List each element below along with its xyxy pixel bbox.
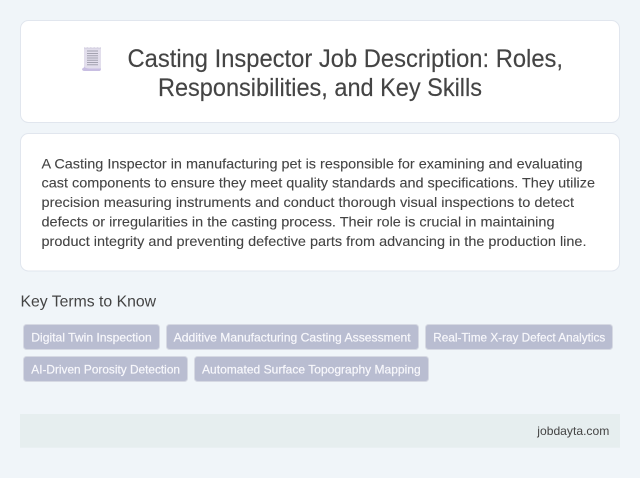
text block: description: precision measuring instruments and conduct thorough visual inspections to detect [42,194,574,210]
footer bar: jobdayta.com [536,424,609,438]
icon: document scroll [82,47,101,71]
tag: additive manufacturing casting assessment: Additive Manufacturing Casting Assessment [174,330,411,344]
text block: description: A Casting Inspector in manufacturing pet is responsible for examining and evaluating [42,155,582,171]
text block: description: cast components to ensure they meet quality standards and specifications. They utilize [42,174,595,190]
tag: automated surface topography mapping: Automated Surface Topography Mapping [202,362,421,376]
text block: description: product integrity and preventing defective parts from advancing in the production line. [42,233,586,249]
tag: additive manufacturing casting assessment [166,324,418,350]
heading: title: Casting Inspector Job Description: Roles, [128,45,563,73]
tag: digital twin inspection: Digital Twin Inspection [31,330,152,344]
tag: ai-driven porosity detection: AI-Driven Porosity Detection [31,362,180,376]
tag: real-time x-ray defect analytics: Real-Time X-ray Defect Analytics [433,330,605,344]
panel: description card [20,134,620,271]
footer bar [20,414,620,448]
tag: automated surface topography mapping [194,356,428,382]
tag list: key terms [24,324,612,382]
heading: title: Responsibilities, and Key Skills [158,74,482,102]
tag: ai-driven porosity detection [24,356,188,382]
panel: title card [20,20,620,122]
tag: real-time x-ray defect analytics [426,324,612,350]
heading: title [128,45,563,102]
heading: key terms: Key Terms to Know [20,294,156,311]
tag: digital twin inspection [24,324,160,350]
text block: description [42,155,595,249]
text block: description: defects or irregularities in the casting process. Their role is crucial in maintaining [42,214,554,230]
